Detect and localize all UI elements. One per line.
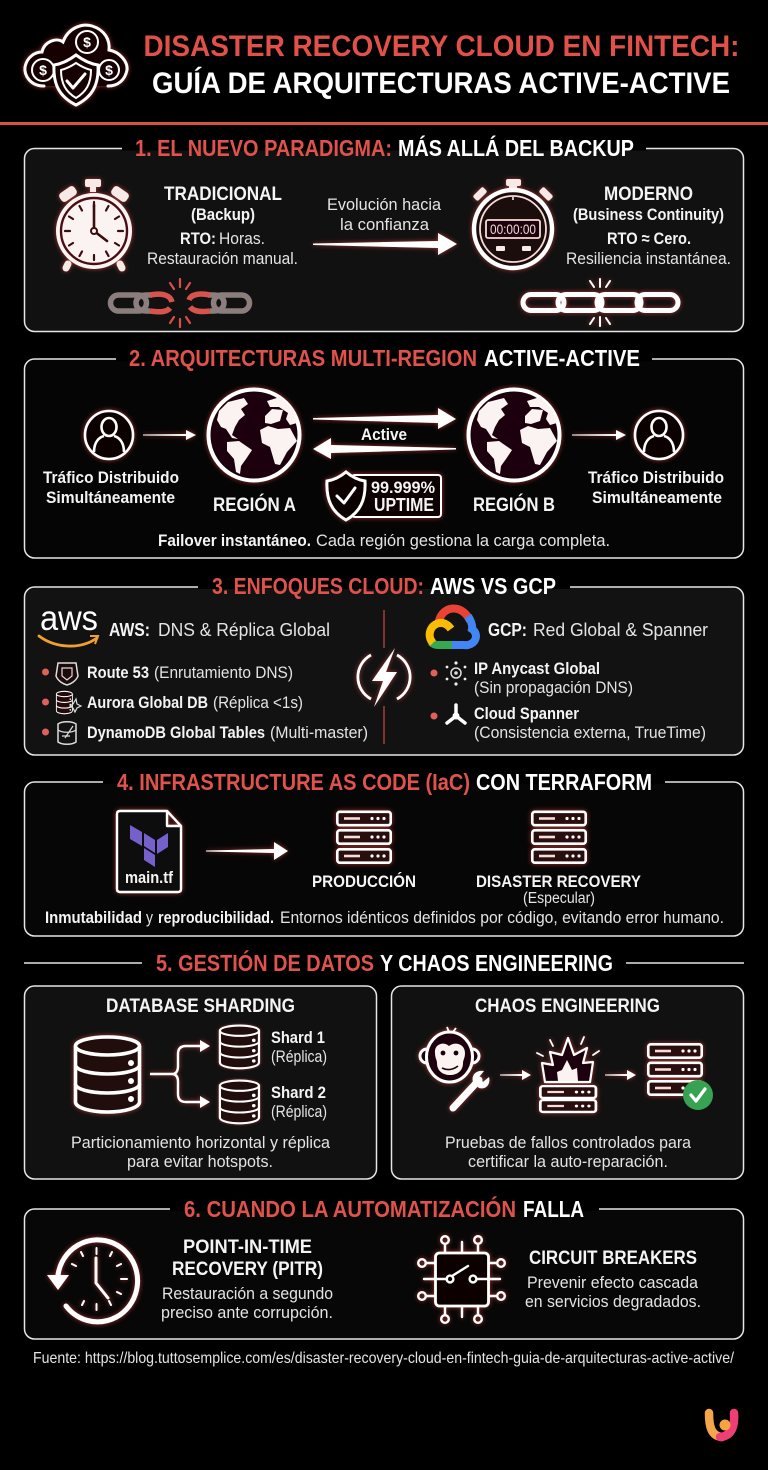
- chaos caption: certificar la auto-reparación.: [468, 1152, 668, 1171]
- caption 4: [45, 908, 724, 927]
- arrow: evolution: la confianza: [340, 215, 430, 234]
- connector arrows: [150, 1040, 210, 1108]
- shard 2: Shard 2: [271, 1083, 326, 1102]
- text: circuit breakers: en servicios degradados.: [525, 1292, 701, 1311]
- icon: rewind clock: [47, 1240, 138, 1322]
- shard 2: (Réplica): [271, 1102, 327, 1121]
- heading 5: [24, 949, 744, 976]
- heading 3: AWS VS GCP: [430, 573, 556, 599]
- AWS heading: AWS:: [109, 620, 150, 640]
- arrow: to recovery: [605, 1070, 636, 1080]
- text: traditional: Horas.: [219, 229, 265, 248]
- caption 4: y: [146, 908, 153, 927]
- text: traditional: TRADICIONAL: [164, 184, 282, 205]
- text: PITR: preciso ante corrupción.: [161, 1303, 333, 1322]
- GCP heading: GCP:: [488, 620, 527, 640]
- AWS item: Aurora: (Réplica <1s): [213, 693, 303, 712]
- heading 4: CON TERRAFORM: [476, 769, 652, 795]
- sharding caption: Particionamiento horizontal y réplica: [71, 1133, 331, 1152]
- text: modern: Resiliencia instantánea.: [566, 249, 731, 268]
- GCP item: Anycast: [430, 659, 633, 697]
- caption 2: Failover instantáneo.: [158, 531, 311, 550]
- icon: circuit breaker chip: [418, 1236, 505, 1323]
- users left: [43, 411, 196, 507]
- text: traditional: (Backup): [191, 205, 255, 224]
- users left: Tráfico Distribuido: [43, 468, 179, 487]
- header icon: cloud, coins and shield: [25, 25, 127, 105]
- title rule: [0, 122, 768, 125]
- AWS item: Route 53: [42, 663, 293, 685]
- sharding caption: [71, 1133, 331, 1171]
- logo: brand mark: [709, 1413, 734, 1437]
- caption 2: [158, 531, 610, 550]
- panel 1: new paradigm: [24, 134, 744, 332]
- title: [144, 30, 740, 100]
- icon: exploding server: [537, 1037, 599, 1112]
- sharding title: DATABASE SHARDING: [106, 996, 295, 1017]
- text: traditional: [147, 184, 298, 268]
- heading 4: 4. INFRASTRUCTURE AS CODE (IaC): [117, 769, 470, 795]
- heading 6: 6. CUANDO LA AUTOMATIZACIÓN: [184, 1195, 516, 1222]
- shard 1: (Réplica): [271, 1047, 327, 1066]
- text: circuit breakers: Prevenir efecto cascada: [527, 1273, 698, 1292]
- heading 2: ACTIVE-ACTIVE: [484, 345, 640, 371]
- AWS item: DynamoDB: DynamoDB Global Tables: [87, 723, 265, 742]
- text: PITR: [161, 1237, 333, 1322]
- logo: AWS: aws: [40, 599, 98, 638]
- text: circuit breakers: CIRCUIT BREAKERS: [529, 1248, 697, 1269]
- uptime badge: [327, 472, 441, 520]
- panel 5a: database sharding: [24, 986, 376, 1179]
- panel 2: multi-region: [24, 345, 744, 558]
- heading 6: FALLA: [523, 1196, 584, 1222]
- disaster recovery server: (Especular): [523, 890, 595, 907]
- text: PITR: RECOVERY (PITR): [172, 1259, 323, 1280]
- header icon: cloud, coins and shield: $: [105, 62, 113, 78]
- uptime badge: 99.999%: [371, 478, 435, 497]
- uptime badge: UPTIME: [374, 495, 434, 515]
- text: modern: (Business Continuity): [573, 205, 724, 224]
- heading 5: Y CHAOS ENGINEERING: [380, 950, 613, 976]
- arrow: deploy: [206, 842, 288, 860]
- text: circuit breakers: [525, 1248, 701, 1311]
- text: modern: RTO ≈ Cero.: [607, 229, 691, 248]
- icon: terraform file: [117, 811, 181, 892]
- title: DISASTER RECOVERY CLOUD EN FINTECH:: [144, 30, 740, 63]
- GCP item: Spanner: Cloud Spanner: [474, 704, 579, 723]
- text: modern: MODERNO: [604, 184, 693, 205]
- chaos caption: [445, 1133, 691, 1171]
- heading 1: [135, 134, 634, 161]
- users right: [572, 411, 724, 507]
- caption 4: reproducibilidad.: [158, 908, 274, 927]
- GCP item: Anycast: (Sin propagación DNS): [474, 678, 633, 697]
- header icon: cloud, coins and shield: $: [83, 34, 91, 50]
- shard 2: [220, 1081, 327, 1123]
- heading 3: 3. ENFOQUES CLOUD:: [212, 573, 424, 599]
- arrow: to failure: [500, 1070, 531, 1080]
- icon: intact chain: [523, 279, 678, 326]
- panel 6: when automation fails: [24, 1195, 744, 1339]
- header icon: cloud, coins and shield: $: [39, 62, 47, 78]
- production server: PRODUCCIÓN: [312, 872, 416, 891]
- icon: healthy server with check: [648, 1044, 713, 1110]
- title: GUÍA DE ARQUITECTURAS ACTIVE-ACTIVE: [152, 66, 730, 100]
- AWS item: Route 53: (Enrutamiento DNS): [154, 663, 293, 682]
- sharding caption: para evitar hotspots.: [127, 1152, 273, 1171]
- heading 5: 5. GESTIÓN DE DATOS: [156, 949, 374, 976]
- panel 4: infrastructure as code: [24, 769, 744, 936]
- AWS item: DynamoDB: (Multi-master): [270, 723, 368, 742]
- text: PITR: POINT-IN-TIME: [183, 1237, 312, 1258]
- GCP item: Spanner: (Consistencia externa, TrueTime): [474, 723, 706, 742]
- heading 1: MÁS ALLÁ DEL BACKUP: [398, 134, 634, 161]
- icon: main database: [76, 1037, 140, 1112]
- text: PITR: Restauración a segundo: [162, 1284, 333, 1303]
- arrow: evolution: Evolución hacia: [327, 195, 442, 214]
- text: traditional: Restauración manual.: [147, 249, 298, 268]
- icon: stopwatch: [473, 179, 553, 268]
- heading 1: 1. EL NUEVO PARADIGMA:: [135, 135, 392, 161]
- users right: Simultáneamente: [592, 488, 722, 507]
- shard 1: Shard 1: [271, 1028, 325, 1047]
- arrows: active replication: Active: [361, 425, 407, 444]
- icon: stopwatch: 00:00:00: [490, 222, 536, 237]
- GCP heading: Red Global & Spanner: [533, 620, 708, 640]
- versus divider and lightning: [358, 610, 410, 744]
- region A: REGIÓN A: [213, 494, 296, 516]
- logo: Google Cloud: [430, 609, 476, 645]
- AWS heading: DNS & Réplica Global: [158, 620, 330, 640]
- chaos title: CHAOS ENGINEERING: [475, 996, 660, 1017]
- GCP item: Anycast: IP Anycast Global: [474, 659, 600, 678]
- AWS item: Route 53: Route 53: [87, 663, 149, 682]
- text: traditional: RTO:: [180, 229, 216, 248]
- panel 5b: chaos engineering: [392, 986, 744, 1179]
- production server: [312, 812, 416, 891]
- region B: [468, 390, 560, 516]
- heading 2: 2. ARQUITECTURAS MULTI-REGION: [129, 345, 477, 371]
- caption 4: Entornos idénticos definidos por código, evitando error humano.: [280, 908, 724, 927]
- shard 1: [220, 1026, 327, 1068]
- AWS item: DynamoDB: [42, 722, 368, 744]
- region A: [208, 390, 300, 516]
- users right: Tráfico Distribuido: [588, 468, 724, 487]
- GCP item: Spanner: [430, 704, 706, 742]
- icon: alarm clock: [56, 179, 132, 269]
- chaos caption: Pruebas de fallos controlados para: [445, 1133, 691, 1152]
- disaster recovery server: [476, 812, 642, 907]
- disaster recovery server: DISASTER RECOVERY: [476, 872, 642, 891]
- panel 3: cloud approaches: [24, 573, 744, 755]
- region B: REGIÓN B: [473, 494, 555, 516]
- AWS item: Aurora: Aurora Global DB: [87, 693, 208, 712]
- arrows: active replication: [313, 408, 456, 459]
- icon: broken chain: [110, 279, 250, 327]
- caption 2: Cada región gestiona la carga completa.: [316, 531, 610, 550]
- AWS item: Aurora: [42, 691, 303, 714]
- icon: terraform file: main.tf: [125, 868, 173, 887]
- users left: Simultáneamente: [46, 488, 175, 507]
- icon: monkey and wrench: [420, 1027, 489, 1108]
- arrow: evolution: [313, 195, 457, 255]
- text: modern: [566, 184, 731, 268]
- caption 4: Inmutabilidad: [45, 908, 142, 927]
